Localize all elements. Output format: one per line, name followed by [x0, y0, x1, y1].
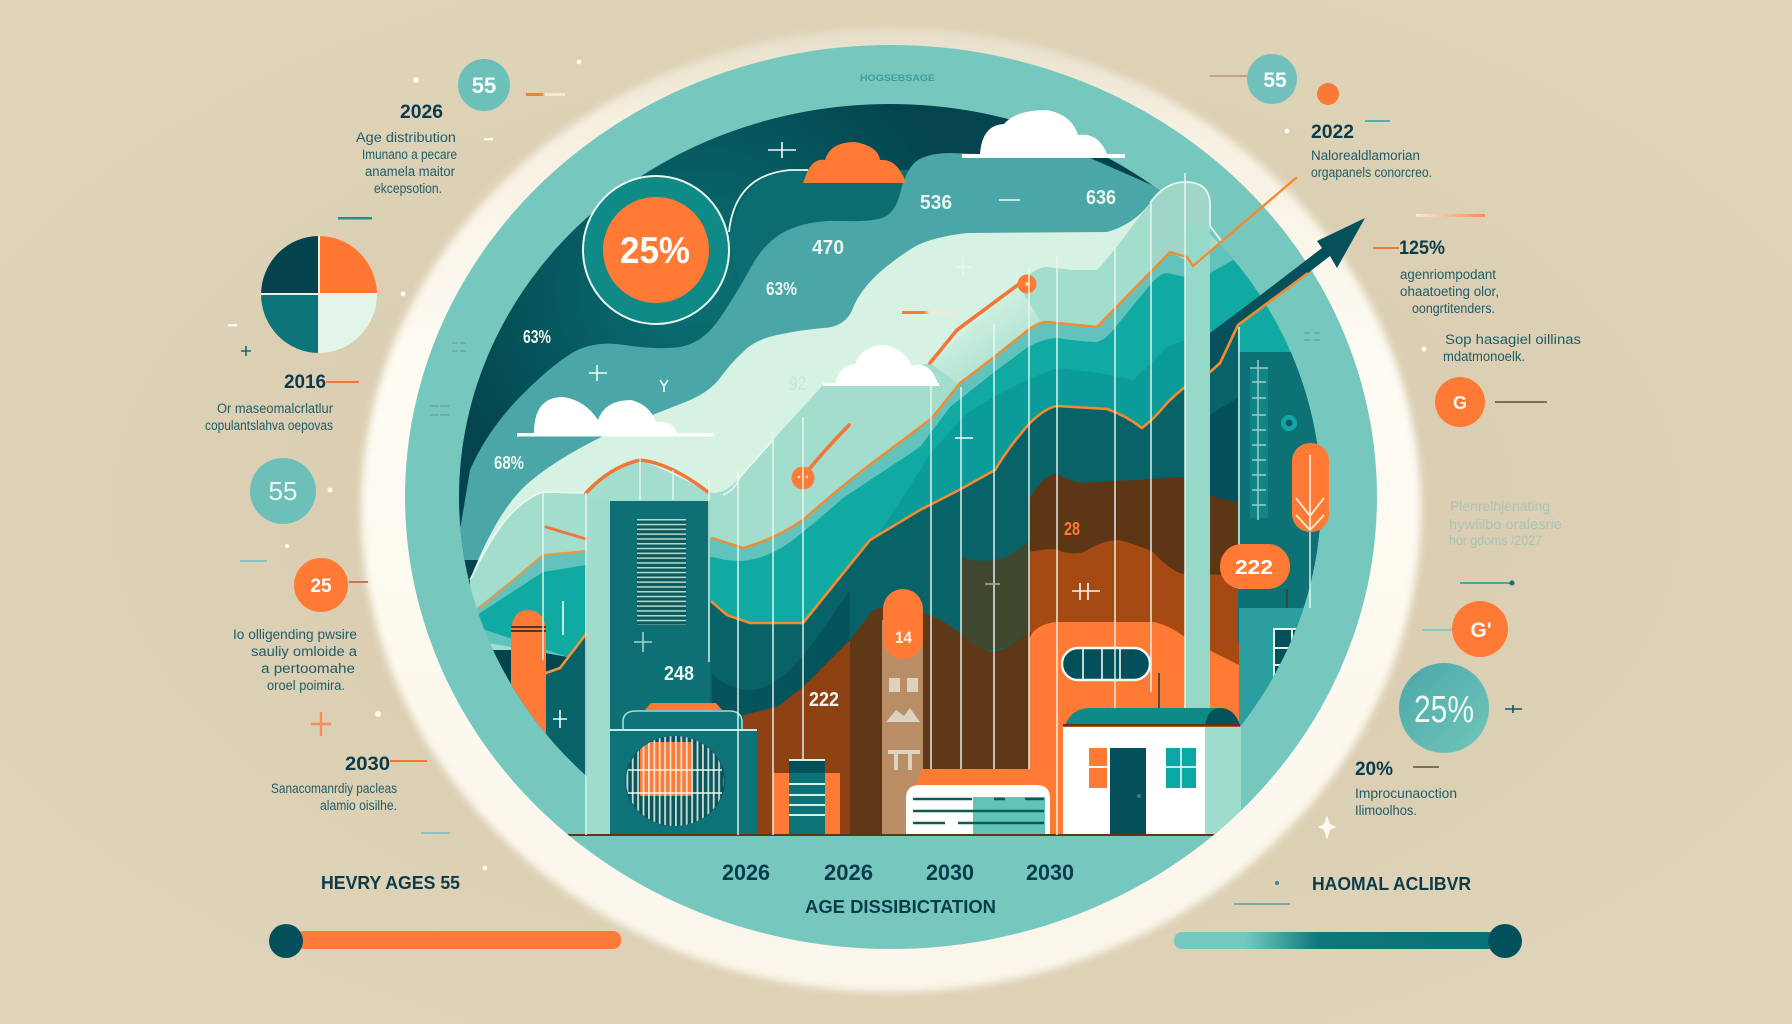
right slider — [1174, 924, 1522, 958]
left badge: 25: 25 — [310, 576, 332, 597]
tan building details — [886, 678, 920, 770]
left callout: 55 badge top: 55 — [472, 73, 496, 98]
left text block: orange badge note: sauliy omloide a — [251, 644, 358, 659]
sparkles and crosses inside circle — [553, 142, 1100, 728]
right text block: 20% — [1355, 759, 1457, 818]
line markers — [792, 274, 1036, 490]
left text block: 2026 — [356, 102, 457, 196]
panel: layered landscape scene — [440, 90, 1340, 850]
scene numbers: 68% — [494, 453, 524, 473]
mint wave — [470, 203, 1170, 640]
right badge: 25%: 25% — [1414, 689, 1474, 731]
left text block: 2026: Imunano a pecare — [362, 147, 457, 162]
dash near upper marker — [902, 311, 957, 314]
badge: 25%: 25% — [620, 230, 690, 271]
right faded text block — [1449, 498, 1562, 548]
right badge: G orange — [1422, 580, 1514, 657]
left text block: 2026: anamela maitor — [365, 164, 455, 179]
right callout: 55 badge top — [1210, 54, 1339, 105]
right badge: G — [1435, 377, 1547, 427]
building scene foreground — [560, 500, 1241, 838]
left text block: orange badge note: a pertoomahe — [261, 661, 355, 676]
olive layer — [962, 540, 1029, 650]
right text block: 2022: 2022 — [1311, 122, 1354, 143]
house — [1063, 673, 1241, 835]
right tower ruler — [1250, 360, 1268, 520]
scene numbers: 92 — [789, 374, 806, 395]
right text block: note: Sop hasagiel oillinas — [1445, 332, 1581, 347]
teal tower building — [610, 501, 710, 729]
right text block: 20%: Improcunaoction — [1355, 786, 1457, 801]
left badge: 25 — [294, 558, 368, 612]
thin lines behind chart — [470, 440, 773, 580]
222 pill: 222 — [1235, 557, 1273, 579]
line chart: lower orange trend — [480, 273, 1308, 673]
scene numbers: 28 — [1064, 519, 1080, 539]
scene numbers: 636 — [1086, 187, 1116, 209]
right tower — [1238, 352, 1328, 642]
scene numbers — [494, 187, 1116, 711]
scene numbers: 63% — [766, 279, 797, 299]
light teal wave — [455, 153, 1200, 560]
orange tower pill — [883, 589, 923, 659]
orange cloud — [803, 142, 906, 183]
right text block: 20%: 20% — [1355, 759, 1393, 780]
left badge: 55: 55 — [269, 476, 297, 506]
icon: orange plus — [311, 712, 331, 736]
decorative marks left — [228, 60, 582, 870]
left text block: 2016: copulantslahva oepovas — [205, 418, 333, 433]
vent — [637, 519, 686, 625]
white cloud top — [962, 110, 1125, 158]
scene numbers: 222 — [809, 689, 839, 711]
teal stack with orange sides — [773, 759, 840, 835]
mint column — [587, 538, 610, 834]
light teal band — [477, 244, 1290, 657]
bottom year axis: 2030 — [926, 860, 974, 885]
arrow underline orange — [1210, 273, 1308, 372]
orange tower pill: 14 — [895, 628, 912, 647]
222 pill — [1220, 544, 1290, 608]
right badge: G orange: G' — [1470, 619, 1492, 642]
dark teal corner — [1210, 398, 1238, 502]
right faded text block: Plenrelhjenating — [1450, 498, 1550, 514]
left text block: 2026: ekcepsotion. — [374, 181, 442, 196]
left callout: 55 badge top — [458, 59, 565, 111]
left slider — [269, 924, 621, 958]
thin vertical chart lines — [543, 173, 1310, 835]
bottom year axis: 2026 — [824, 860, 873, 885]
right text block: note: mdatmonoelk. — [1443, 349, 1525, 364]
scene numbers: 248 — [664, 663, 694, 685]
right badge: 25% — [1399, 663, 1522, 753]
right badge: G: G — [1453, 393, 1467, 413]
porthole window — [1062, 648, 1150, 680]
left text block: 2026: Age distribution — [356, 130, 456, 145]
orange leaf pill — [1292, 443, 1329, 532]
left text block: 2016: Or maseomalcrlatlur — [217, 401, 333, 416]
right heading — [1234, 874, 1471, 905]
tall pale column and arch — [1150, 182, 1222, 708]
left text block: orange badge note — [233, 627, 358, 693]
darker teal chart layer — [880, 330, 1240, 532]
mid brown slope — [743, 610, 880, 840]
bottom year axis: 2026 — [722, 860, 770, 885]
white cloud left — [517, 397, 714, 436]
bottom year axis — [722, 860, 1074, 885]
right faded text block: hywlilbo oralesrie — [1449, 516, 1562, 532]
halo ring around main circle — [361, 28, 1421, 992]
right text block: 125% — [1373, 214, 1499, 316]
white curve from badge — [729, 170, 808, 232]
rust layer — [1030, 540, 1239, 665]
right text block: 125%: agenriompodant — [1400, 267, 1496, 282]
left heading: HEVRY AGES 55 — [321, 873, 460, 893]
pie chart — [261, 236, 377, 353]
AC unit — [610, 703, 757, 835]
right callout: 55 badge top: 55 — [1263, 69, 1287, 92]
teal blob behind badge — [733, 170, 909, 250]
scene numbers: 536 — [920, 192, 952, 214]
right text block: 2022: orgapanels conorcreo. — [1311, 165, 1432, 180]
left text block: 2016: 2016 — [284, 372, 326, 393]
mint fade under thick line — [930, 285, 1040, 385]
badge: 25% — [583, 176, 729, 324]
left text block: 2026: 2026 — [400, 102, 443, 123]
scene numbers: 470 — [812, 237, 844, 259]
left badge: 55 — [250, 458, 316, 524]
decorative marks right — [430, 128, 1426, 416]
right text block: 125%: ohaatoeting olor, — [1400, 284, 1499, 299]
white low building — [906, 769, 1050, 835]
deep teal chart layer — [478, 260, 1317, 656]
left text block: 2030 — [271, 754, 427, 813]
darkest teal blob — [712, 590, 850, 720]
orange slope — [1029, 622, 1239, 840]
right heading: HAOMAL ACLIBVR — [1312, 874, 1471, 894]
lower right building — [1239, 608, 1304, 727]
line chart: upper orange trend — [712, 178, 1296, 548]
right text block: 20%: Ilimoolhos. — [1355, 803, 1417, 818]
left text block: orange badge note: oroel poimira. — [267, 678, 345, 693]
tan building — [882, 620, 923, 835]
dark teal chart layer — [546, 328, 1320, 776]
smokestack — [511, 610, 546, 734]
right text block: 2022: Nalorealdlamorian — [1311, 148, 1420, 163]
left text block: orange badge note: Io olligending pwsire — [233, 627, 357, 642]
scene numbers: 63% — [523, 327, 551, 347]
main circle ring — [405, 45, 1377, 949]
pale chart layer — [470, 182, 1260, 650]
left text block: 2030: 2030 — [345, 754, 390, 775]
right text block: 125%: 125% — [1399, 238, 1445, 259]
bottom year axis: 2030 — [1026, 860, 1074, 885]
right text block: note — [1443, 332, 1581, 364]
right text block: 2022 — [1311, 120, 1432, 180]
right faded text block: hor gdoms /2027 — [1449, 532, 1542, 548]
growth arrow — [1210, 218, 1365, 372]
right tower dial — [1281, 415, 1297, 431]
left text block: 2030: alamio oisilhe. — [320, 798, 397, 813]
left text block: 2016 — [205, 372, 359, 433]
white cloud middle — [823, 345, 939, 386]
right text block: 125%: oongrtitenders. — [1412, 301, 1495, 316]
bottom axis title: AGE DISSIBICTATION — [805, 897, 996, 917]
icon: sparkle — [1318, 815, 1336, 840]
dark brown slope — [850, 607, 1040, 840]
dark brown upper layer — [1029, 473, 1239, 640]
ground line — [567, 834, 1215, 836]
left text block: 2030: Sanacomanrdiy pacleas — [271, 781, 397, 796]
top label: HOGSEBSAGE — [860, 73, 935, 83]
